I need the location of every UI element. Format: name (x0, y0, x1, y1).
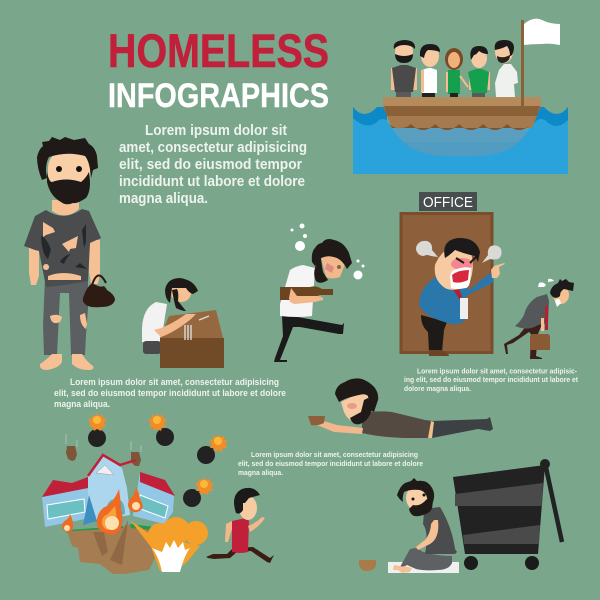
torn shirt (24, 209, 101, 287)
arm (416, 520, 438, 550)
neck (52, 200, 79, 216)
flames (97, 489, 123, 535)
arm (289, 288, 323, 304)
beard (47, 172, 90, 204)
water (353, 107, 568, 174)
text block 2: Lorem ipsum dolor sit amet, consectetur adipisicing (70, 377, 279, 387)
office sign: OFFICE (423, 194, 473, 211)
big homeless man (24, 137, 115, 370)
trousers (421, 315, 447, 352)
head (341, 389, 370, 422)
angry boss (416, 238, 505, 356)
mat (388, 562, 459, 573)
torso (423, 507, 457, 554)
broken house (42, 455, 175, 574)
bowl (308, 416, 325, 425)
businessman walking (504, 279, 574, 359)
falling rocks (66, 434, 141, 466)
legs (274, 316, 344, 362)
right wing (133, 472, 174, 524)
person 5 white robe (495, 40, 518, 97)
title (108, 24, 329, 115)
person 1 ragged (391, 40, 417, 97)
running man (206, 488, 274, 563)
legs (400, 548, 452, 570)
bomb 1 (88, 413, 107, 447)
intro text block: incididunt ut labore et dolore (119, 174, 305, 190)
briefcase (530, 334, 550, 350)
grey jacket (515, 294, 549, 329)
legs (432, 417, 493, 438)
explosion (130, 517, 208, 572)
pointing hand (491, 263, 505, 278)
head (320, 251, 345, 278)
person 4 green shirt (468, 46, 490, 97)
bubbles (290, 224, 364, 280)
head (48, 150, 90, 196)
bombs (88, 413, 228, 507)
hair (37, 137, 98, 180)
title: HOMELESS (108, 24, 329, 77)
head (406, 485, 430, 511)
intro text block: elit, sed do eiusmod tempor (119, 157, 302, 173)
text block 3: dolore magna aliqua. (404, 384, 471, 393)
text block 3: ing elit, sed do eiusmod tempor incididunt ut labore et (404, 375, 578, 384)
head (171, 284, 191, 302)
suit (419, 272, 494, 324)
bowl (359, 560, 376, 571)
arms (29, 240, 100, 285)
bomb 4 (183, 477, 214, 507)
text block 2: elit, sed do eiusmod tempor incididunt ut labore et dolore (54, 388, 286, 398)
intro text block: amet, consectetur adipisicing (119, 140, 307, 156)
shirt (280, 265, 315, 317)
boat hull (383, 97, 541, 130)
head (438, 256, 446, 264)
legs (206, 547, 274, 563)
boat with people on water (353, 19, 568, 174)
cliff (66, 524, 168, 574)
text block 3: Lorem ipsum dolor sit amet, consectetur adipisic- (417, 366, 577, 376)
left wing (42, 488, 90, 527)
head (553, 286, 569, 304)
trash bin (453, 459, 562, 570)
text block 3 (404, 366, 578, 393)
arm (317, 419, 363, 434)
feet (40, 354, 93, 370)
table (160, 310, 223, 338)
pants (43, 278, 88, 355)
text block 2: magna aliqua. (54, 399, 110, 409)
intro text block: magna aliqua. (119, 191, 208, 207)
title: INFOGRAPHICS (108, 77, 329, 115)
legs (504, 324, 542, 359)
text block 4 (238, 450, 423, 477)
tie (545, 306, 548, 330)
text block 2 (54, 377, 286, 409)
text block 4: magna aliqua. (238, 468, 283, 477)
steam (416, 241, 502, 263)
person 3 woman (445, 48, 468, 97)
shirt (362, 411, 433, 438)
arms (225, 517, 265, 542)
intro text block (119, 123, 307, 207)
lying man with bowl (308, 378, 493, 438)
text block 4: Lorem ipsum dolor sit amet, consectetur adipisicing (251, 450, 418, 459)
red shirt (232, 518, 249, 553)
sweat (538, 279, 554, 287)
sitting man with bowl (359, 478, 459, 573)
handbag (83, 275, 115, 307)
bomb 2 (148, 413, 174, 446)
text block 4: elit, sed do eiusmod tempor incididunt ut labore et dolore (238, 459, 423, 468)
bottle (280, 286, 333, 300)
person 2 white shirt (420, 44, 440, 97)
center block (88, 455, 130, 522)
skin rips (43, 222, 87, 329)
flag (521, 19, 560, 106)
bomb 3 (197, 434, 228, 464)
person with table (142, 278, 224, 368)
office door (401, 214, 492, 352)
intro text block: Lorem ipsum dolor sit (145, 123, 287, 139)
white shirt (142, 302, 167, 342)
drunk man (274, 224, 364, 362)
lines on table (185, 316, 209, 340)
head (239, 496, 257, 520)
